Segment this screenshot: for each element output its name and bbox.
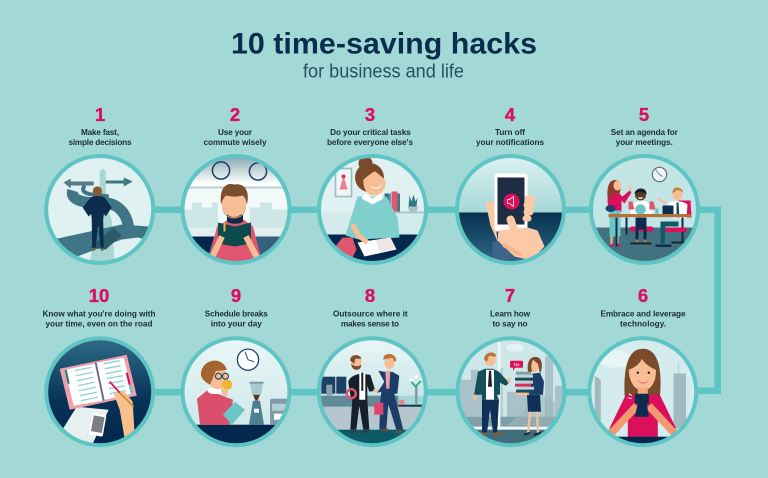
step 8 text <box>333 310 408 329</box>
step 2 text: commute wisely <box>204 138 267 147</box>
step 10 illustration: planner <box>46 338 153 446</box>
step 1 text: Make fast, <box>81 128 119 137</box>
step 5 illustration: meeting <box>591 156 698 263</box>
step 3 <box>319 104 426 263</box>
subtitle: for business and life <box>303 62 464 82</box>
step 6 <box>589 285 696 445</box>
step 7 <box>458 285 564 445</box>
step 7 illustration: saying no <box>458 338 564 445</box>
step 1 text <box>68 128 132 147</box>
step 9 <box>182 285 290 445</box>
clock <box>652 167 667 182</box>
step 3 text: Do your critical tasks <box>330 128 411 137</box>
step 10 <box>42 285 156 446</box>
step 4 text: your notifications <box>476 138 544 147</box>
step 1 number: 1 <box>95 104 105 125</box>
step 8 <box>319 285 426 445</box>
step 5 text: Set an agenda for <box>611 128 679 137</box>
step 7 text: Learn how <box>490 310 531 319</box>
step 7 text: to say no <box>492 320 528 329</box>
step 9 illustration: coffee break <box>182 338 290 445</box>
step 6 illustration: woman with phone <box>589 338 696 445</box>
step 6 text: technology. <box>620 320 666 329</box>
step 9 text: into your day <box>211 320 262 329</box>
step 4 text <box>476 128 544 147</box>
step 5 number: 5 <box>639 104 649 125</box>
step 5 <box>591 104 698 263</box>
connector path linking the steps <box>150 206 721 396</box>
step 1 illustration: crossroads <box>40 156 154 264</box>
step 6 text: Embrace and leverage <box>600 310 686 319</box>
title: 10 time-saving hacks <box>231 28 537 60</box>
step 8 text: Outsource where it <box>333 310 408 319</box>
step 2 <box>182 104 290 263</box>
step 10 text <box>42 310 156 329</box>
step 8 text: makes sense to <box>341 320 399 329</box>
step 9 text <box>205 310 268 329</box>
speech bubble: No <box>514 362 520 367</box>
step 10 text: your time, even on the road <box>46 320 152 329</box>
step 3 text <box>327 128 413 147</box>
step 2 text <box>204 128 267 147</box>
clock <box>237 349 259 370</box>
step 5 text: your meetings. <box>616 138 673 147</box>
step 1 <box>40 104 154 264</box>
step 1 text: simple decisions <box>68 138 132 147</box>
step 9 text: Schedule breaks <box>205 310 268 319</box>
step 4 number: 4 <box>505 104 516 125</box>
step 7 number: 7 <box>505 285 515 306</box>
step 2 number: 2 <box>230 104 240 125</box>
step 10 number: 10 <box>89 285 109 306</box>
step 3 number: 3 <box>365 104 375 125</box>
step 8 number: 8 <box>365 285 375 306</box>
step 4 <box>457 104 564 263</box>
step 6 text <box>600 310 686 329</box>
step 4 text: Turn off <box>495 128 525 137</box>
step 6 number: 6 <box>638 285 648 306</box>
step 3 illustration: woman at desk <box>319 156 426 263</box>
step 3 text: before everyone else's <box>327 138 413 147</box>
step 9 number: 9 <box>231 285 241 306</box>
step 2 text: Use your <box>218 128 253 137</box>
step 7 text <box>490 310 531 329</box>
step 2 illustration: reading on train <box>182 156 290 263</box>
step 4 illustration: phone in hand <box>457 156 564 263</box>
step 10 text: Know what you're doing with <box>42 310 156 319</box>
step 8 illustration: handshake <box>319 338 426 445</box>
step 5 text <box>611 128 679 147</box>
